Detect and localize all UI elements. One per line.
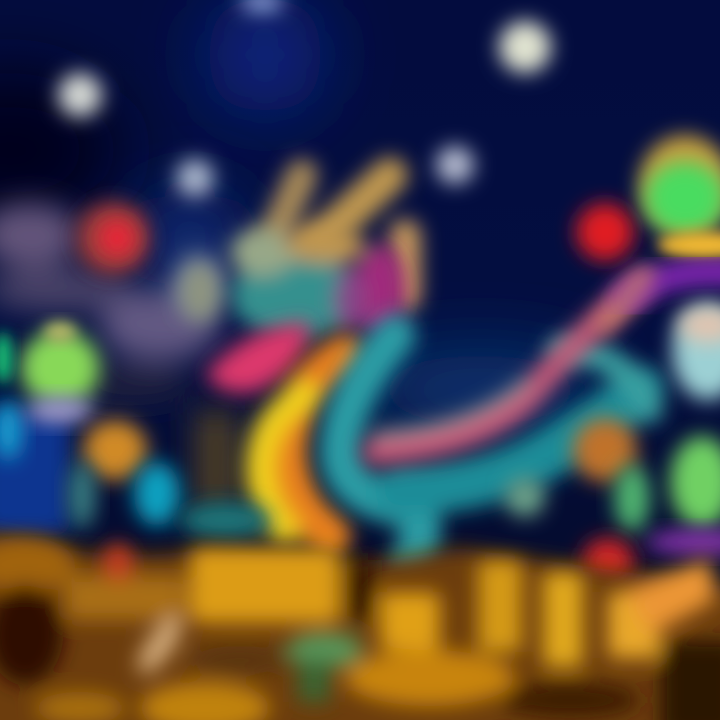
dragon: rainbow neck stripe [260,355,345,535]
figures, right [573,304,720,586]
dragon: pink back stripe [375,285,640,452]
stars [58,0,551,197]
dragon: orb [505,477,545,517]
distant buildings, left [0,203,237,510]
dragon: teal body [340,335,650,565]
dragon: lower left fin [179,502,271,538]
dragon: horns [270,175,405,295]
figures, left [0,322,180,535]
ground: golden blocks [0,530,720,720]
lantern: red left [76,201,150,275]
lantern: green and red, right [576,135,720,330]
dragon: head [180,227,406,339]
dragon [179,175,650,565]
dragon: mouth [205,322,310,393]
